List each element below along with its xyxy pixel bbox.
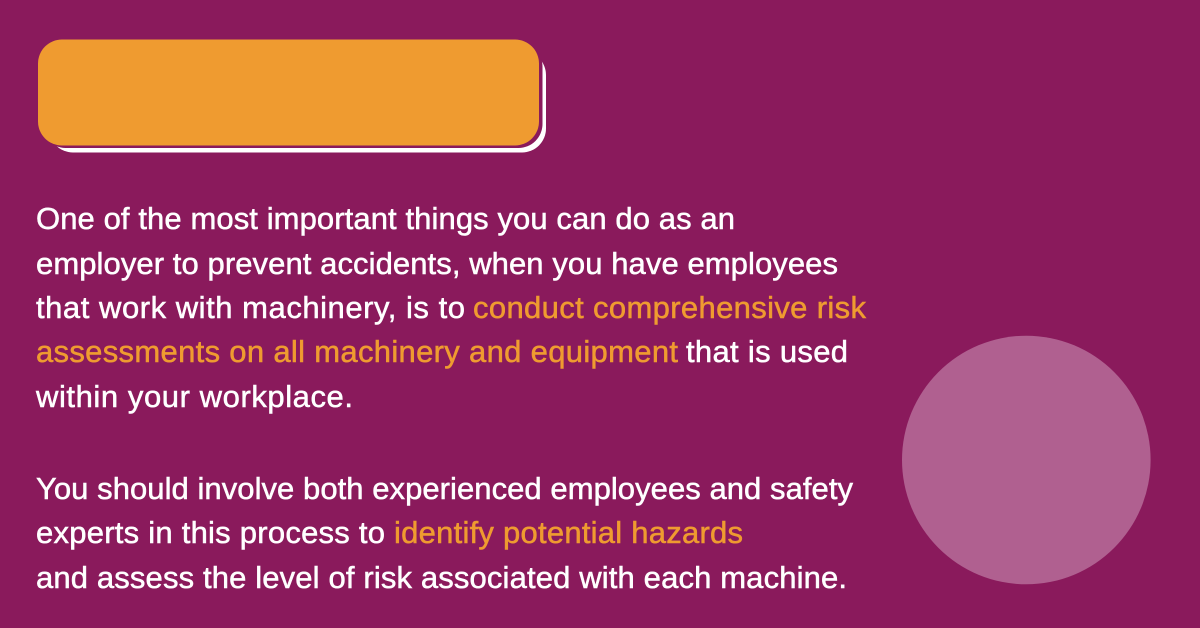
paragraph 2: You should involve both experienced employees and safety (36, 471, 854, 506)
heading banner (38, 40, 546, 152)
paragraph 1: that work with machinery, is to (36, 290, 465, 325)
paragraph 1: employer to prevent accidents, when you have employees (36, 246, 838, 281)
paragraph 1: that is used (686, 334, 848, 369)
paragraph 1: within your workplace. (35, 379, 353, 414)
paragraph 1 (35, 201, 866, 414)
paragraph 1: One of the most important things you can do as an (36, 201, 735, 236)
paragraph 2: identify potential hazards (394, 515, 743, 550)
paragraph 2 (36, 471, 854, 595)
paragraph 2: experts in this process to (36, 515, 385, 550)
paragraph 1: assessments on all machinery and equipment (36, 334, 678, 369)
decorative circle (902, 336, 1151, 584)
paragraph 2: and assess the level of risk associated with each machine. (36, 560, 847, 595)
paragraph 1: conduct comprehensive risk (473, 290, 866, 325)
